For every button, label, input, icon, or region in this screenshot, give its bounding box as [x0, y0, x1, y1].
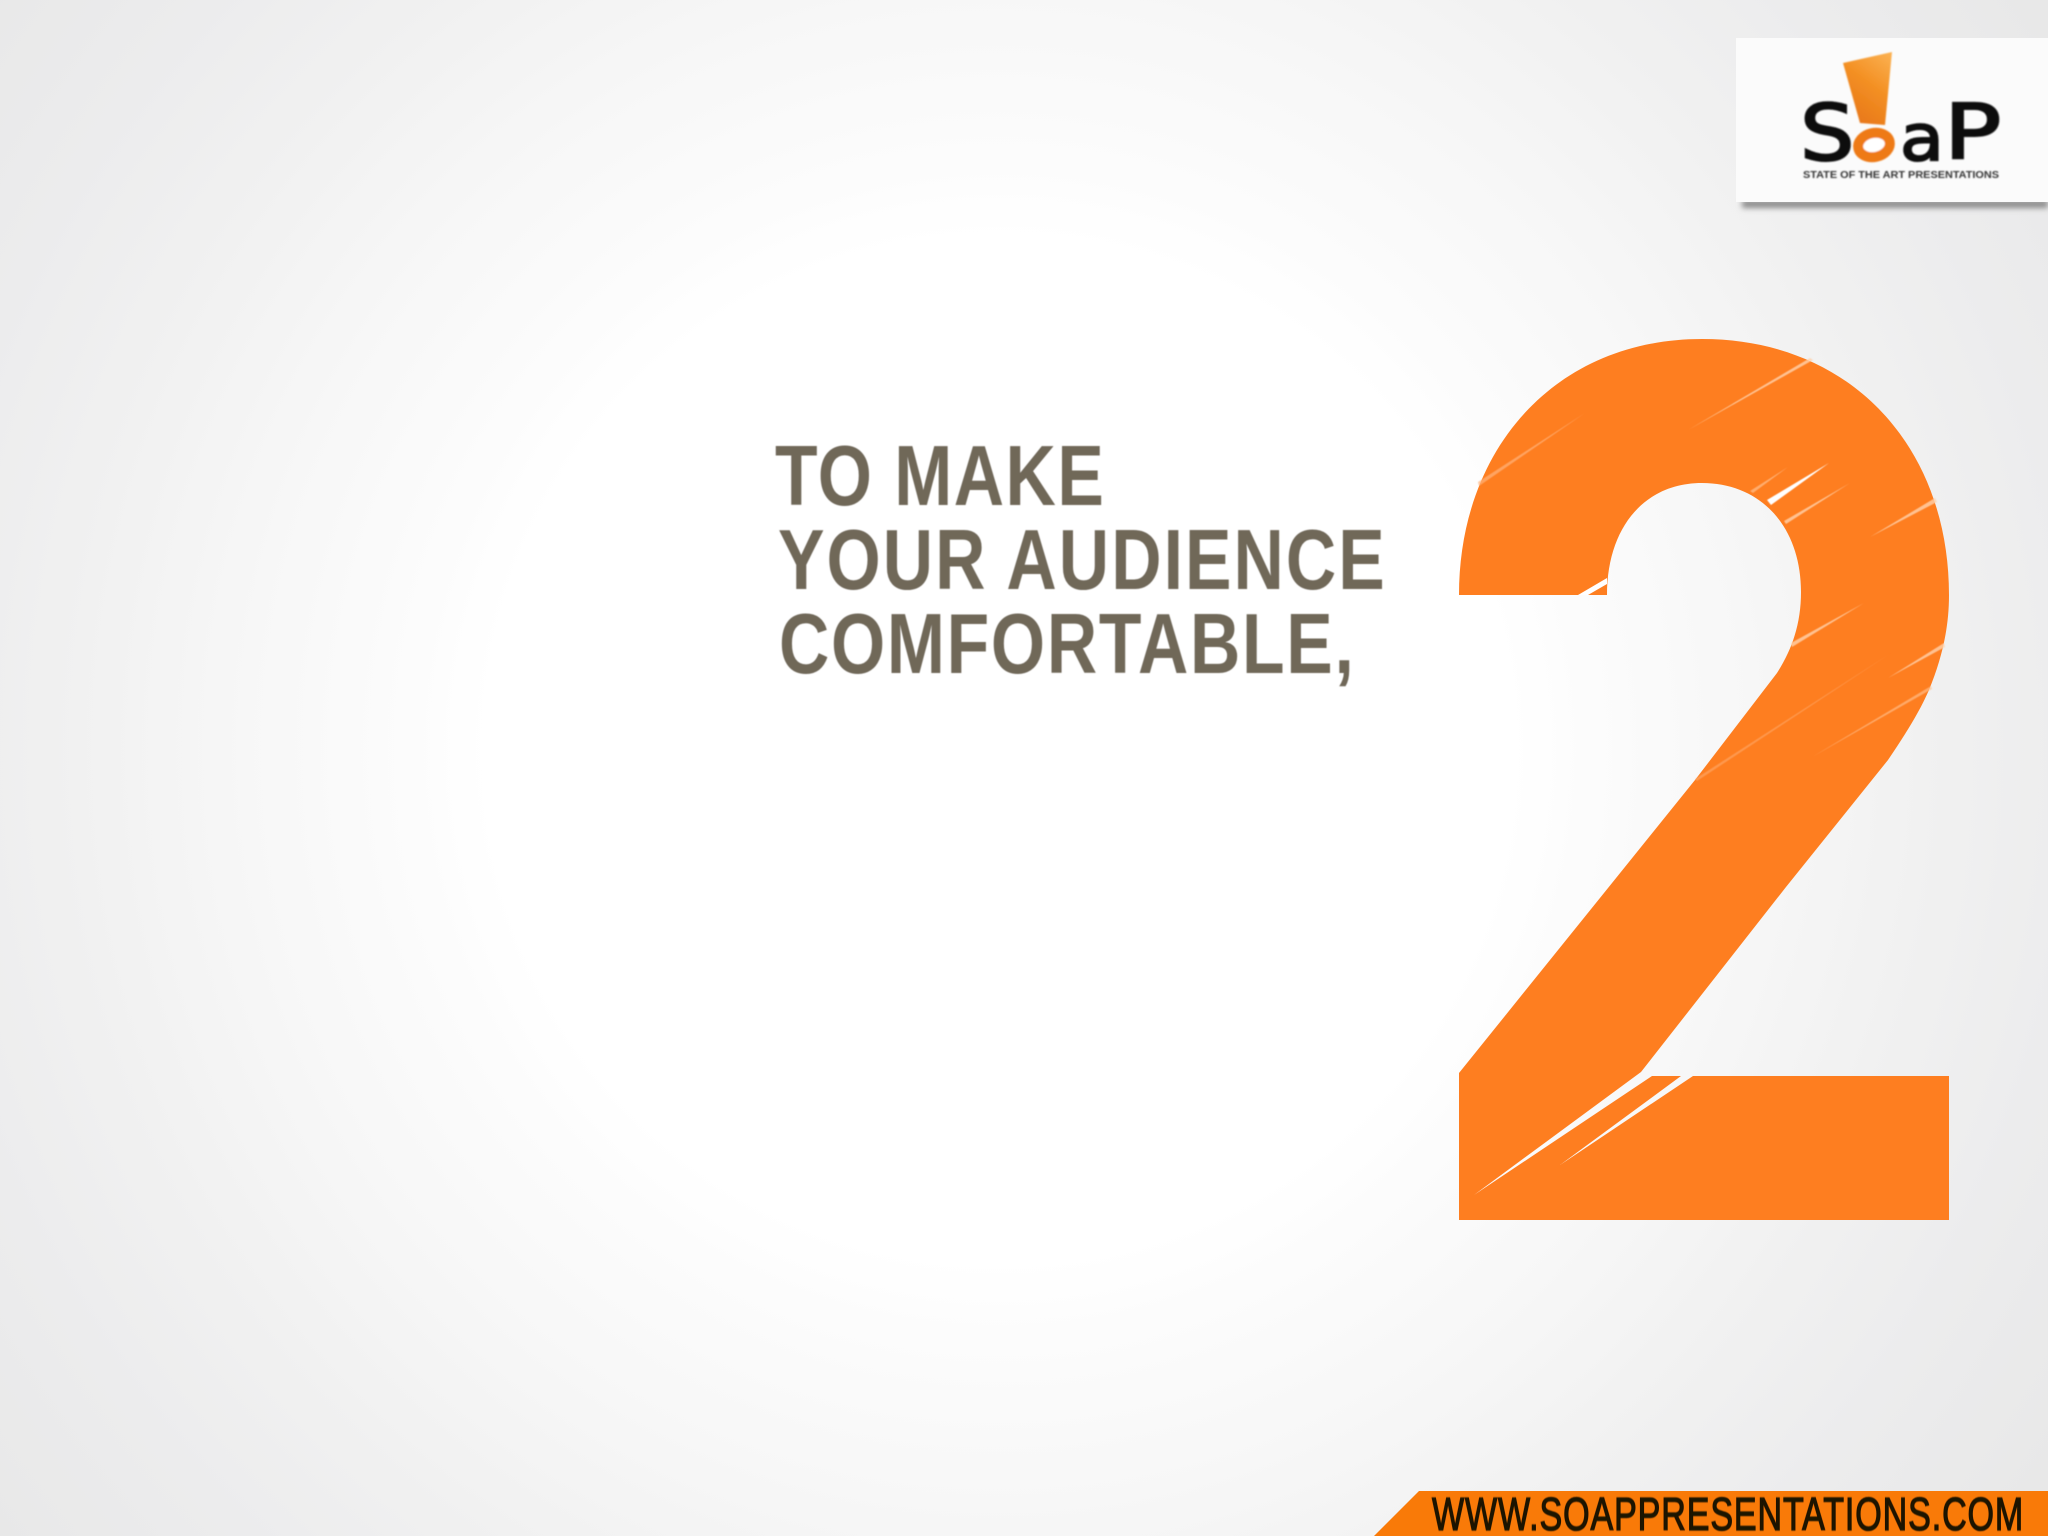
- big orange number 2: [1459, 339, 1949, 1220]
- heading text: [775, 430, 1385, 692]
- logo wordmark: [1800, 88, 2001, 179]
- heading text: COMFORTABLE,: [779, 598, 1354, 692]
- logo mark: [1800, 52, 2001, 181]
- icon: exclamation mark: [1843, 52, 1892, 125]
- heading text: TO MAKE: [775, 430, 1104, 524]
- logo wordmark: S: [1800, 89, 1854, 179]
- logo wordmark: a: [1900, 102, 1944, 176]
- logo panel: [1736, 38, 2048, 208]
- icon: orange ring: [1856, 130, 1892, 160]
- footer banner: [1374, 1488, 2048, 1536]
- heading text: YOUR AUDIENCE: [778, 514, 1385, 608]
- logo tagline: STATE OF THE ART PRESENTATIONS: [1803, 169, 1999, 181]
- logo wordmark: P: [1944, 88, 2001, 177]
